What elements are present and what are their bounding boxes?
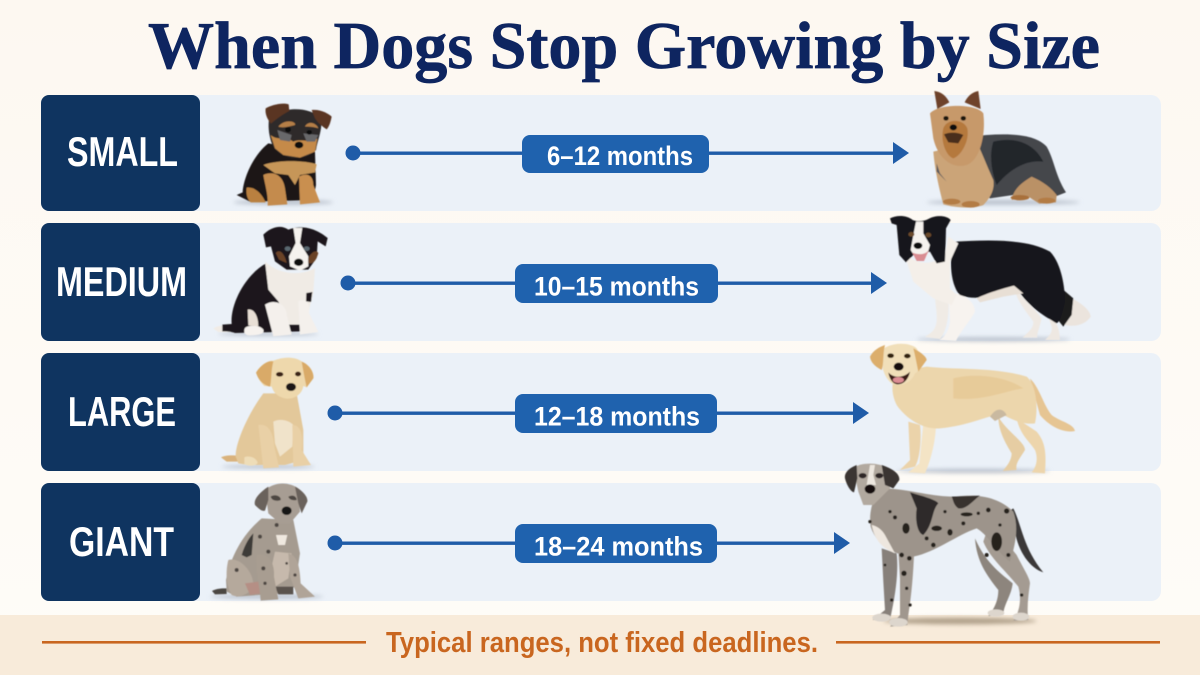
pill: 6–12 months: 6–12 months xyxy=(547,141,693,171)
arrow: small xyxy=(346,142,909,164)
label: medium: MEDIUM xyxy=(56,258,187,305)
footer note: Typical ranges, not fixed deadlines. xyxy=(386,627,818,659)
arrow: medium xyxy=(340,272,887,294)
row: medium xyxy=(41,223,1161,341)
pill: 12–18 months: 12–18 months xyxy=(534,402,700,432)
label: large xyxy=(41,353,200,471)
arrow: large xyxy=(328,402,869,424)
icon: small puppy xyxy=(233,104,333,206)
label: small xyxy=(41,95,200,211)
pill: 18–24 months: 18–24 months xyxy=(534,532,703,562)
pill: 12–18 months xyxy=(515,394,717,433)
title: When Dogs Stop Growing by Size xyxy=(148,9,1100,83)
row: giant xyxy=(41,483,1161,601)
icon: medium puppy xyxy=(213,227,328,336)
icon: adult yorkshire terrier xyxy=(927,91,1080,208)
icon: giant puppy xyxy=(210,484,323,601)
label: large: LARGE xyxy=(68,388,176,435)
pill: 6–12 months xyxy=(522,135,709,173)
footer band xyxy=(0,615,1200,675)
row: small xyxy=(41,95,1161,211)
label: medium xyxy=(41,223,200,341)
icon: adult border collie xyxy=(890,216,1091,341)
pill: 10–15 months xyxy=(515,264,718,303)
pill: 10–15 months: 10–15 months xyxy=(534,272,699,302)
label: giant: GIANT xyxy=(69,518,174,565)
icon: large puppy xyxy=(221,358,315,468)
icon: adult labrador xyxy=(870,344,1075,473)
icon: adult great dane xyxy=(845,464,1043,627)
pill: 18–24 months xyxy=(515,524,717,563)
arrow: giant xyxy=(328,532,850,554)
label: giant xyxy=(41,483,200,601)
row: large xyxy=(41,353,1161,471)
label: small: SMALL xyxy=(67,128,178,175)
